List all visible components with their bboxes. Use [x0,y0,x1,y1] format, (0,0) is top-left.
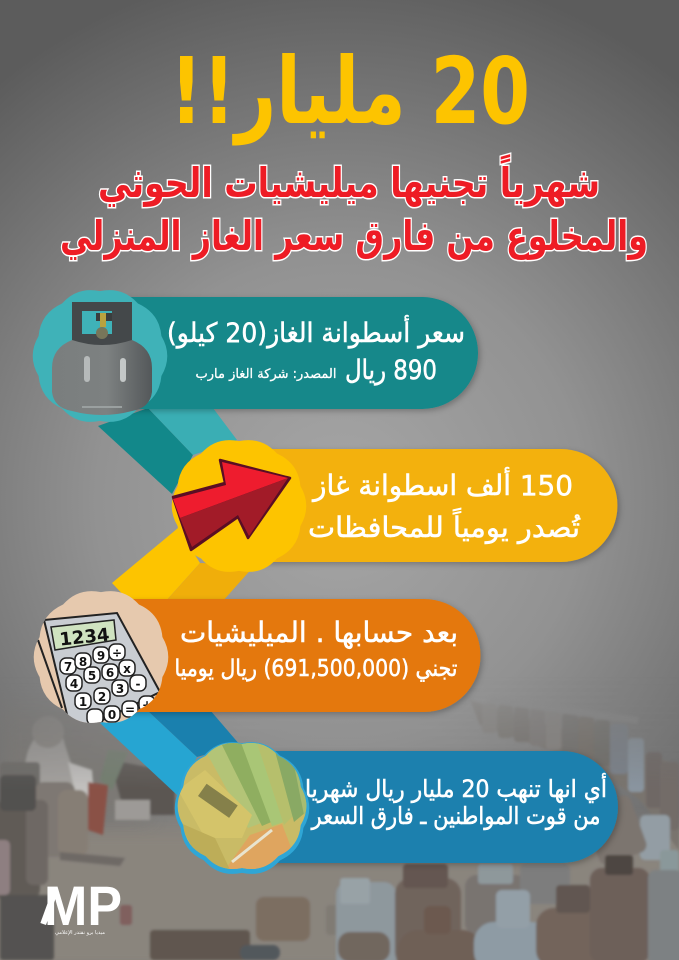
icon: gas cylinder [52,302,152,415]
icon: red arrow [173,460,290,550]
panel: calculation [34,591,480,735]
icon: calculator [38,613,160,735]
badge [34,591,168,723]
icon: calculator: 2 [98,690,106,704]
ribbon: yellow connector [112,528,255,602]
badge [33,290,167,422]
panel: 150 thousand cylinders [172,440,617,572]
icon: banknotes [178,743,306,869]
bottom cylinders [336,882,396,960]
title: 20 مليار!! [170,38,530,145]
badge [172,440,306,572]
icon: calculator: 1234 [58,624,110,651]
row of cylinders top right [470,700,679,850]
icon: calculator: 0 [108,708,116,722]
icon: calculator: - [136,677,141,691]
background photo: gas cylinders and people [0,703,679,960]
icon: calculator: 3 [116,682,124,696]
icon: calculator: ÷ [112,646,122,660]
pill [120,297,478,409]
ribbon: blue connector [100,710,240,795]
text: source: المصدر: شركة الغاز مارب [196,367,336,382]
text: from citizens' food: من قوت المواطنين ـ فارق السعر [311,802,600,830]
text: cylinder price: سعر أسطوانة الغاز(20 كيلو) [167,314,465,349]
panel: 20 billion monthly [170,738,618,878]
icon: calculator: 4 [70,677,78,691]
subtitle [60,154,648,261]
text: exported daily: تُصدر يومياً للمحافظات [308,507,580,544]
text: after calculating: بعد حسابها . الميليشيات [180,616,458,649]
pill [120,599,480,712]
panel: gas cylinder price [33,290,478,422]
icon: calculator: 5 [88,669,96,683]
icon: calculator: 6 [106,666,114,680]
pill [230,449,617,562]
text: 890 riyal: 890 ريال [345,355,437,386]
badge [175,742,309,874]
text: 150 thousand: 150 ألف اسطوانة غاز [311,466,573,502]
icon: calculator: + [142,698,152,712]
text: looting 20 billion: أي انها تنهب 20 مليار ريال شهريا [305,773,607,803]
icon: calculator: 1 [79,695,87,709]
icon: calculator: 7 [64,660,72,674]
ribbon: teal connector [98,408,237,494]
icon: calculator: 9 [97,649,105,663]
icon: calculator: 8 [79,655,87,669]
pill [240,751,618,863]
text: daily revenue: تجني (691,500,000) ريال يوميا [174,656,457,682]
logo: Media Pro: ميديا برو نقتدر الإعلامي [55,930,105,936]
logo: Media Pro: MP [44,874,122,937]
icon: calculator: = [125,703,135,717]
icon: calculator: x [123,662,131,676]
